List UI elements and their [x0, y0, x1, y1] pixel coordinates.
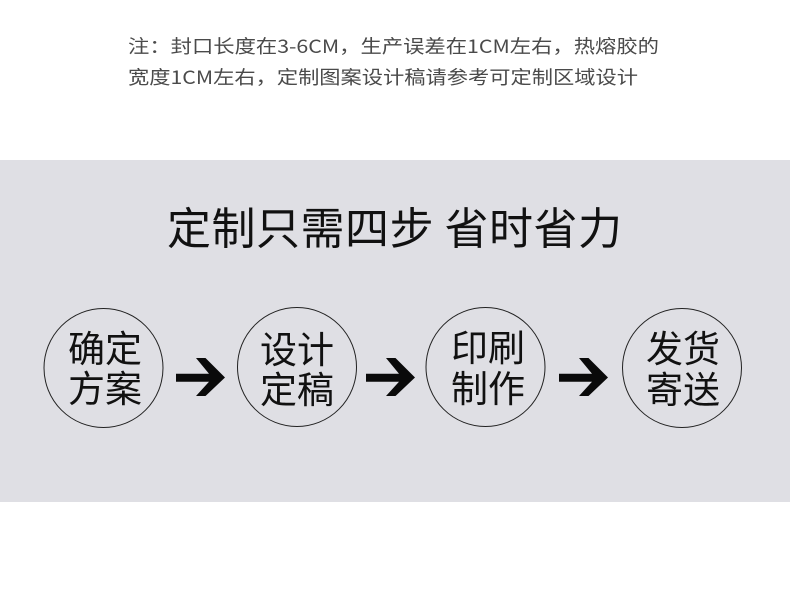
step 2: 设计定稿: 定稿 [260, 360, 334, 414]
step 4: 发货寄送 [622, 308, 742, 428]
step 3: 印刷制作: 印刷 [451, 318, 525, 372]
panel: steps band [0, 160, 790, 502]
step 2: 设计定稿 [238, 308, 356, 426]
arrow 2 [366, 358, 415, 396]
arrow 3 [559, 358, 608, 396]
heading: 定制只需四步 省时省力 [167, 193, 622, 257]
step 3: 印刷制作 [426, 308, 545, 426]
step 1: 确定方案 [44, 308, 163, 428]
step 4: 发货寄送: 寄送 [646, 360, 720, 414]
note text block: 宽度1CM左右，定制图案设计稿请参考可定制区域设计 [128, 64, 638, 90]
note text block [128, 33, 659, 90]
arrow 1 [176, 358, 225, 396]
step 3: 印刷制作: 制作 [451, 359, 525, 413]
step 2: 设计定稿: 设计 [260, 320, 334, 374]
note text block: 注：封口长度在3-6CM，生产误差在1CM左右，热熔胶的 [128, 33, 659, 59]
step 1: 确定方案: 方案 [68, 359, 142, 413]
step 4: 发货寄送: 发货 [646, 319, 720, 373]
step 1: 确定方案: 确定 [68, 319, 142, 373]
